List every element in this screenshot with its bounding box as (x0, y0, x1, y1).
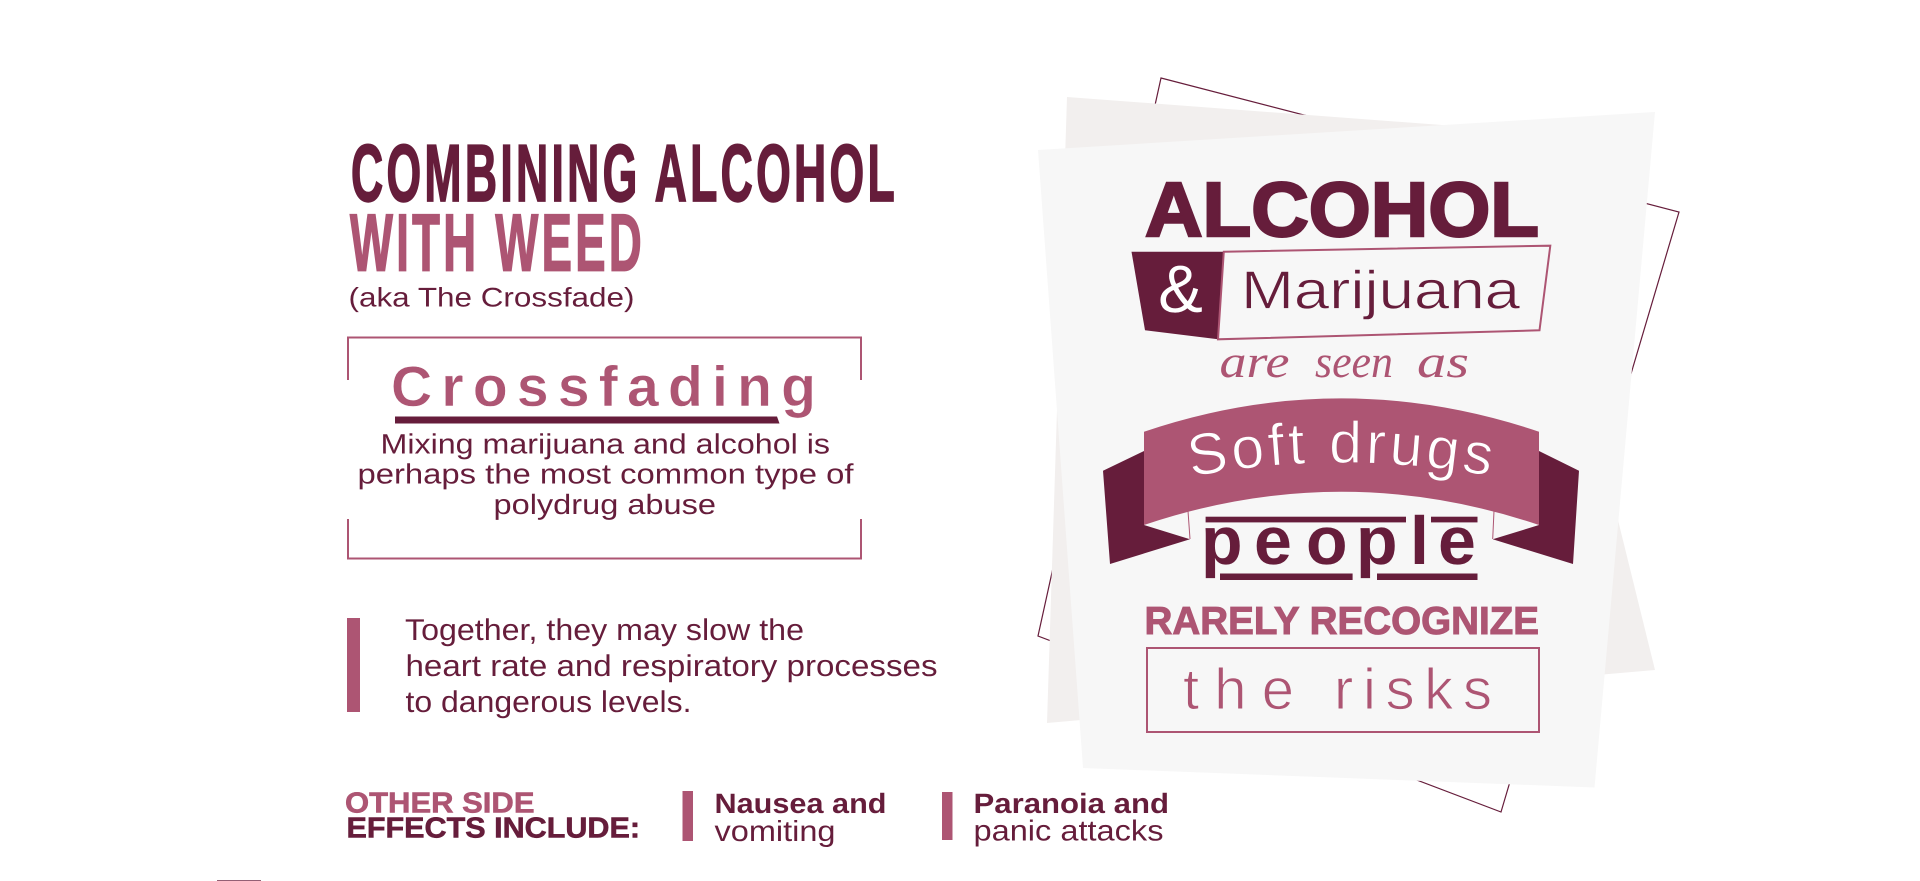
script: are seen as (1220, 336, 1469, 387)
effect: nausea: vomiting (714, 816, 836, 848)
callout text: to dangerous levels. (406, 686, 692, 719)
bracket frame (348, 338, 861, 558)
ribbon (1103, 398, 1579, 564)
ribbon folds (1188, 511, 1494, 539)
definition text (358, 428, 854, 520)
title line 1: COMBINING ALCOHOL (351, 129, 898, 219)
the risks label: the (1183, 657, 1294, 722)
callout text: heart rate and respiratory processes (406, 650, 938, 683)
heading: rarely recognize: RARELY RECOGNIZE (1144, 600, 1539, 643)
effect: paranoia (942, 788, 1169, 848)
title (348, 129, 898, 312)
ribbon band (1144, 398, 1539, 525)
callout text (405, 614, 938, 719)
heading: alcohol: ALCOHOL (1145, 167, 1539, 253)
accent bar (347, 618, 360, 712)
the risks label (1183, 657, 1492, 722)
callout: slowed heart rate (347, 614, 938, 719)
effect: nausea: Nausea and (714, 788, 886, 819)
other side effects (345, 788, 1169, 848)
poster: stacked pages (1037, 77, 1680, 813)
script: are seen as: seen (1315, 336, 1393, 387)
ampersand tag: & (1158, 252, 1203, 327)
definition text: perhaps the most common type of (358, 458, 854, 490)
side effects heading: OTHER SIDE (345, 788, 534, 820)
subtitle: (aka The Crossfade) (348, 282, 634, 312)
panel: crossfading definition (348, 338, 861, 558)
bottom edge sliver (217, 880, 261, 881)
ribbon label: Soft drugs (1190, 420, 1490, 481)
beige page (1047, 97, 1655, 723)
effect: nausea (682, 788, 886, 848)
callout text: Together, they may slow the (405, 614, 804, 647)
marijuana box: Marijuana (1241, 260, 1521, 320)
definition text: Mixing marijuana and alcohol is (380, 428, 830, 460)
heading underline (395, 416, 780, 424)
effect: paranoia: panic attacks (974, 816, 1164, 848)
the risks box (1147, 648, 1539, 732)
effect: paranoia: Paranoia and (974, 788, 1169, 819)
script: are seen as: are (1220, 336, 1290, 387)
marijuana box (1218, 246, 1550, 339)
script: are seen as: as (1417, 336, 1469, 387)
definition text: polydrug abuse (494, 489, 716, 520)
outline page (1038, 78, 1679, 812)
title line 2: WITH WEED (350, 198, 645, 288)
crossfading heading: Crossfading (391, 355, 816, 419)
front page (1038, 112, 1655, 788)
side effects heading: EFFECTS INCLUDE: (346, 812, 640, 844)
the risks label: risks (1334, 657, 1492, 722)
word: people: people (1201, 503, 1476, 579)
side effects heading (345, 788, 640, 844)
ampersand tag (1132, 252, 1224, 339)
ribbon tails (1103, 451, 1190, 564)
